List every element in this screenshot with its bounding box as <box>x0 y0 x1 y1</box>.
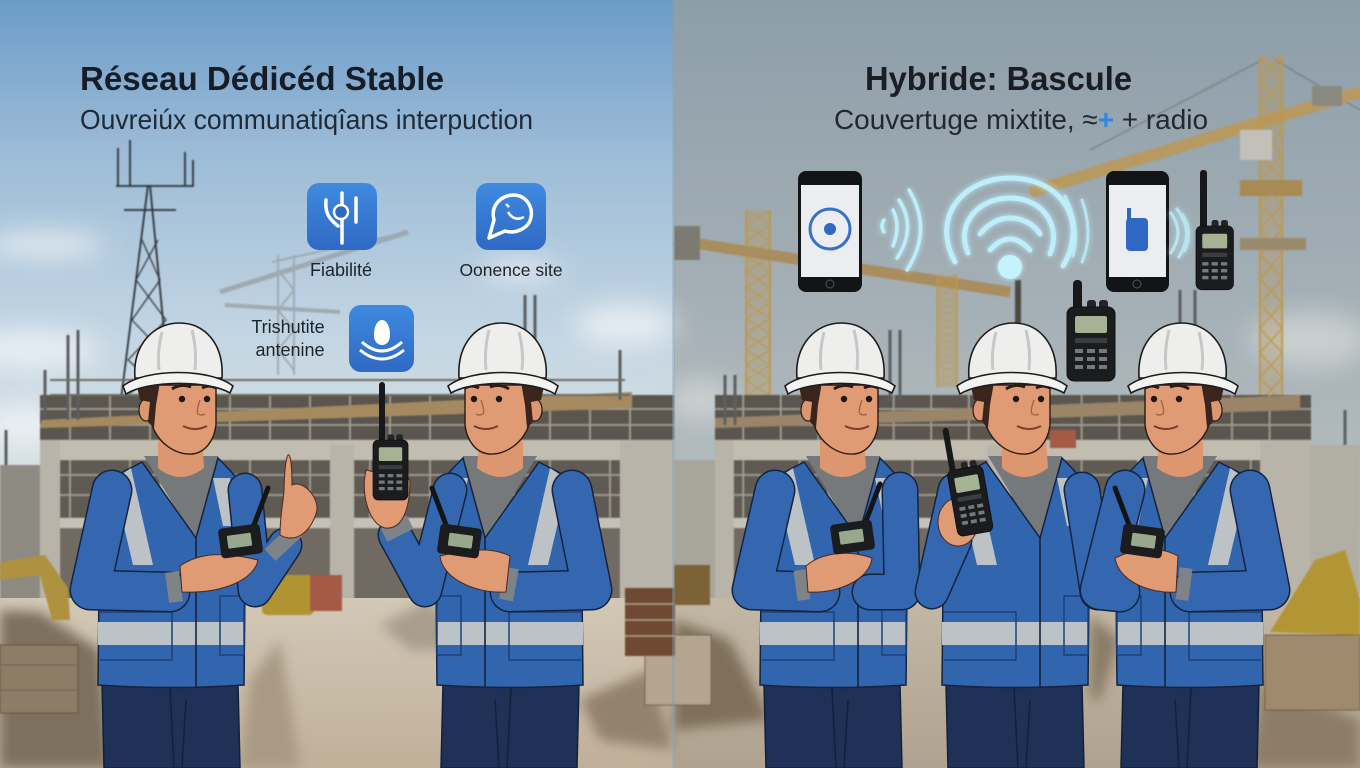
left background: telecom tower <box>114 140 194 455</box>
title: right panel: Hybride: Bascule <box>865 60 1132 97</box>
subtitle: right panel: Couvertuge mixtite, ≈+ + radio <box>834 104 1208 135</box>
icon: radio centre <box>1067 280 1115 381</box>
ground details <box>0 600 1360 768</box>
left ground <box>0 598 674 768</box>
icon: speech bubble <box>476 183 546 250</box>
panel divider <box>672 0 675 768</box>
title: left panel: Réseau Dédicéd Stable <box>80 60 444 97</box>
left background: crane <box>220 232 408 375</box>
label: Trishutite antenine: Trishutite <box>251 317 325 337</box>
icon: phone left <box>798 171 862 292</box>
right background: building under construction <box>674 290 1360 600</box>
icon: wifi symbol <box>947 178 1088 279</box>
right ground <box>674 598 1360 768</box>
worker 2 <box>364 323 592 768</box>
label: Fiabilité: Fiabilité <box>310 260 372 280</box>
clouds <box>0 233 1360 447</box>
background: left panel sky <box>0 0 674 620</box>
worker 1 <box>90 323 317 768</box>
icon: radio top right <box>1196 170 1233 290</box>
worker 5 <box>1100 323 1270 768</box>
icon: reliability <box>307 183 377 250</box>
icon: phone right <box>1106 171 1169 292</box>
label: Trishutite antenine: antenine <box>255 340 325 360</box>
label: Oonence site: Oonence site <box>459 260 563 280</box>
icon: antenna signal <box>349 305 414 372</box>
icon: signal waves <box>882 190 921 270</box>
subtitle: left panel: Ouvreiúx communatiqîans interpuction <box>80 104 533 135</box>
worker 3 <box>752 323 908 768</box>
left background: building under construction <box>0 295 674 600</box>
background: right panel sky <box>674 0 1360 620</box>
icon: radio waves right <box>1170 208 1189 258</box>
worker 4 <box>932 323 1098 768</box>
right background: large cranes <box>674 56 1360 458</box>
